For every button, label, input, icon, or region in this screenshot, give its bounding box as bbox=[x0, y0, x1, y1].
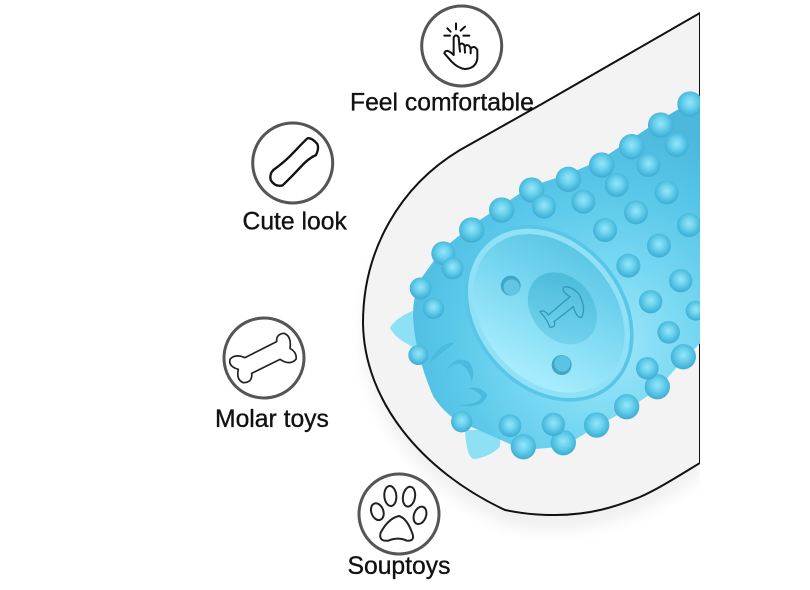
feature: Cute look bbox=[242, 123, 347, 236]
feature: Molar toys bbox=[215, 318, 329, 433]
raised ring bbox=[468, 226, 634, 402]
left fin bbox=[390, 310, 417, 347]
feature: Souptoys bbox=[348, 474, 450, 580]
icon: pointing hand bbox=[422, 6, 502, 86]
label: Molar toys bbox=[215, 406, 329, 433]
label: Feel comfortable bbox=[350, 90, 534, 117]
label: Cute look bbox=[242, 208, 347, 236]
center oval with bone bbox=[528, 272, 597, 344]
recessed well bbox=[474, 234, 624, 392]
toy body bbox=[413, 97, 700, 450]
icon: paw bbox=[359, 474, 439, 554]
icon: bone bbox=[224, 318, 304, 398]
holes bbox=[501, 276, 572, 375]
embossed paw bbox=[429, 342, 487, 406]
panel: rounded product backdrop bbox=[363, 13, 700, 530]
label: Souptoys bbox=[348, 553, 450, 580]
icon: toy outline bbox=[253, 123, 333, 203]
product: blue chew toy bbox=[390, 91, 706, 459]
feature: Feel comfortable bbox=[350, 6, 534, 117]
bottom fin bbox=[465, 430, 500, 459]
infographic canvas bbox=[216, 4, 700, 580]
bumps bbox=[408, 91, 706, 459]
